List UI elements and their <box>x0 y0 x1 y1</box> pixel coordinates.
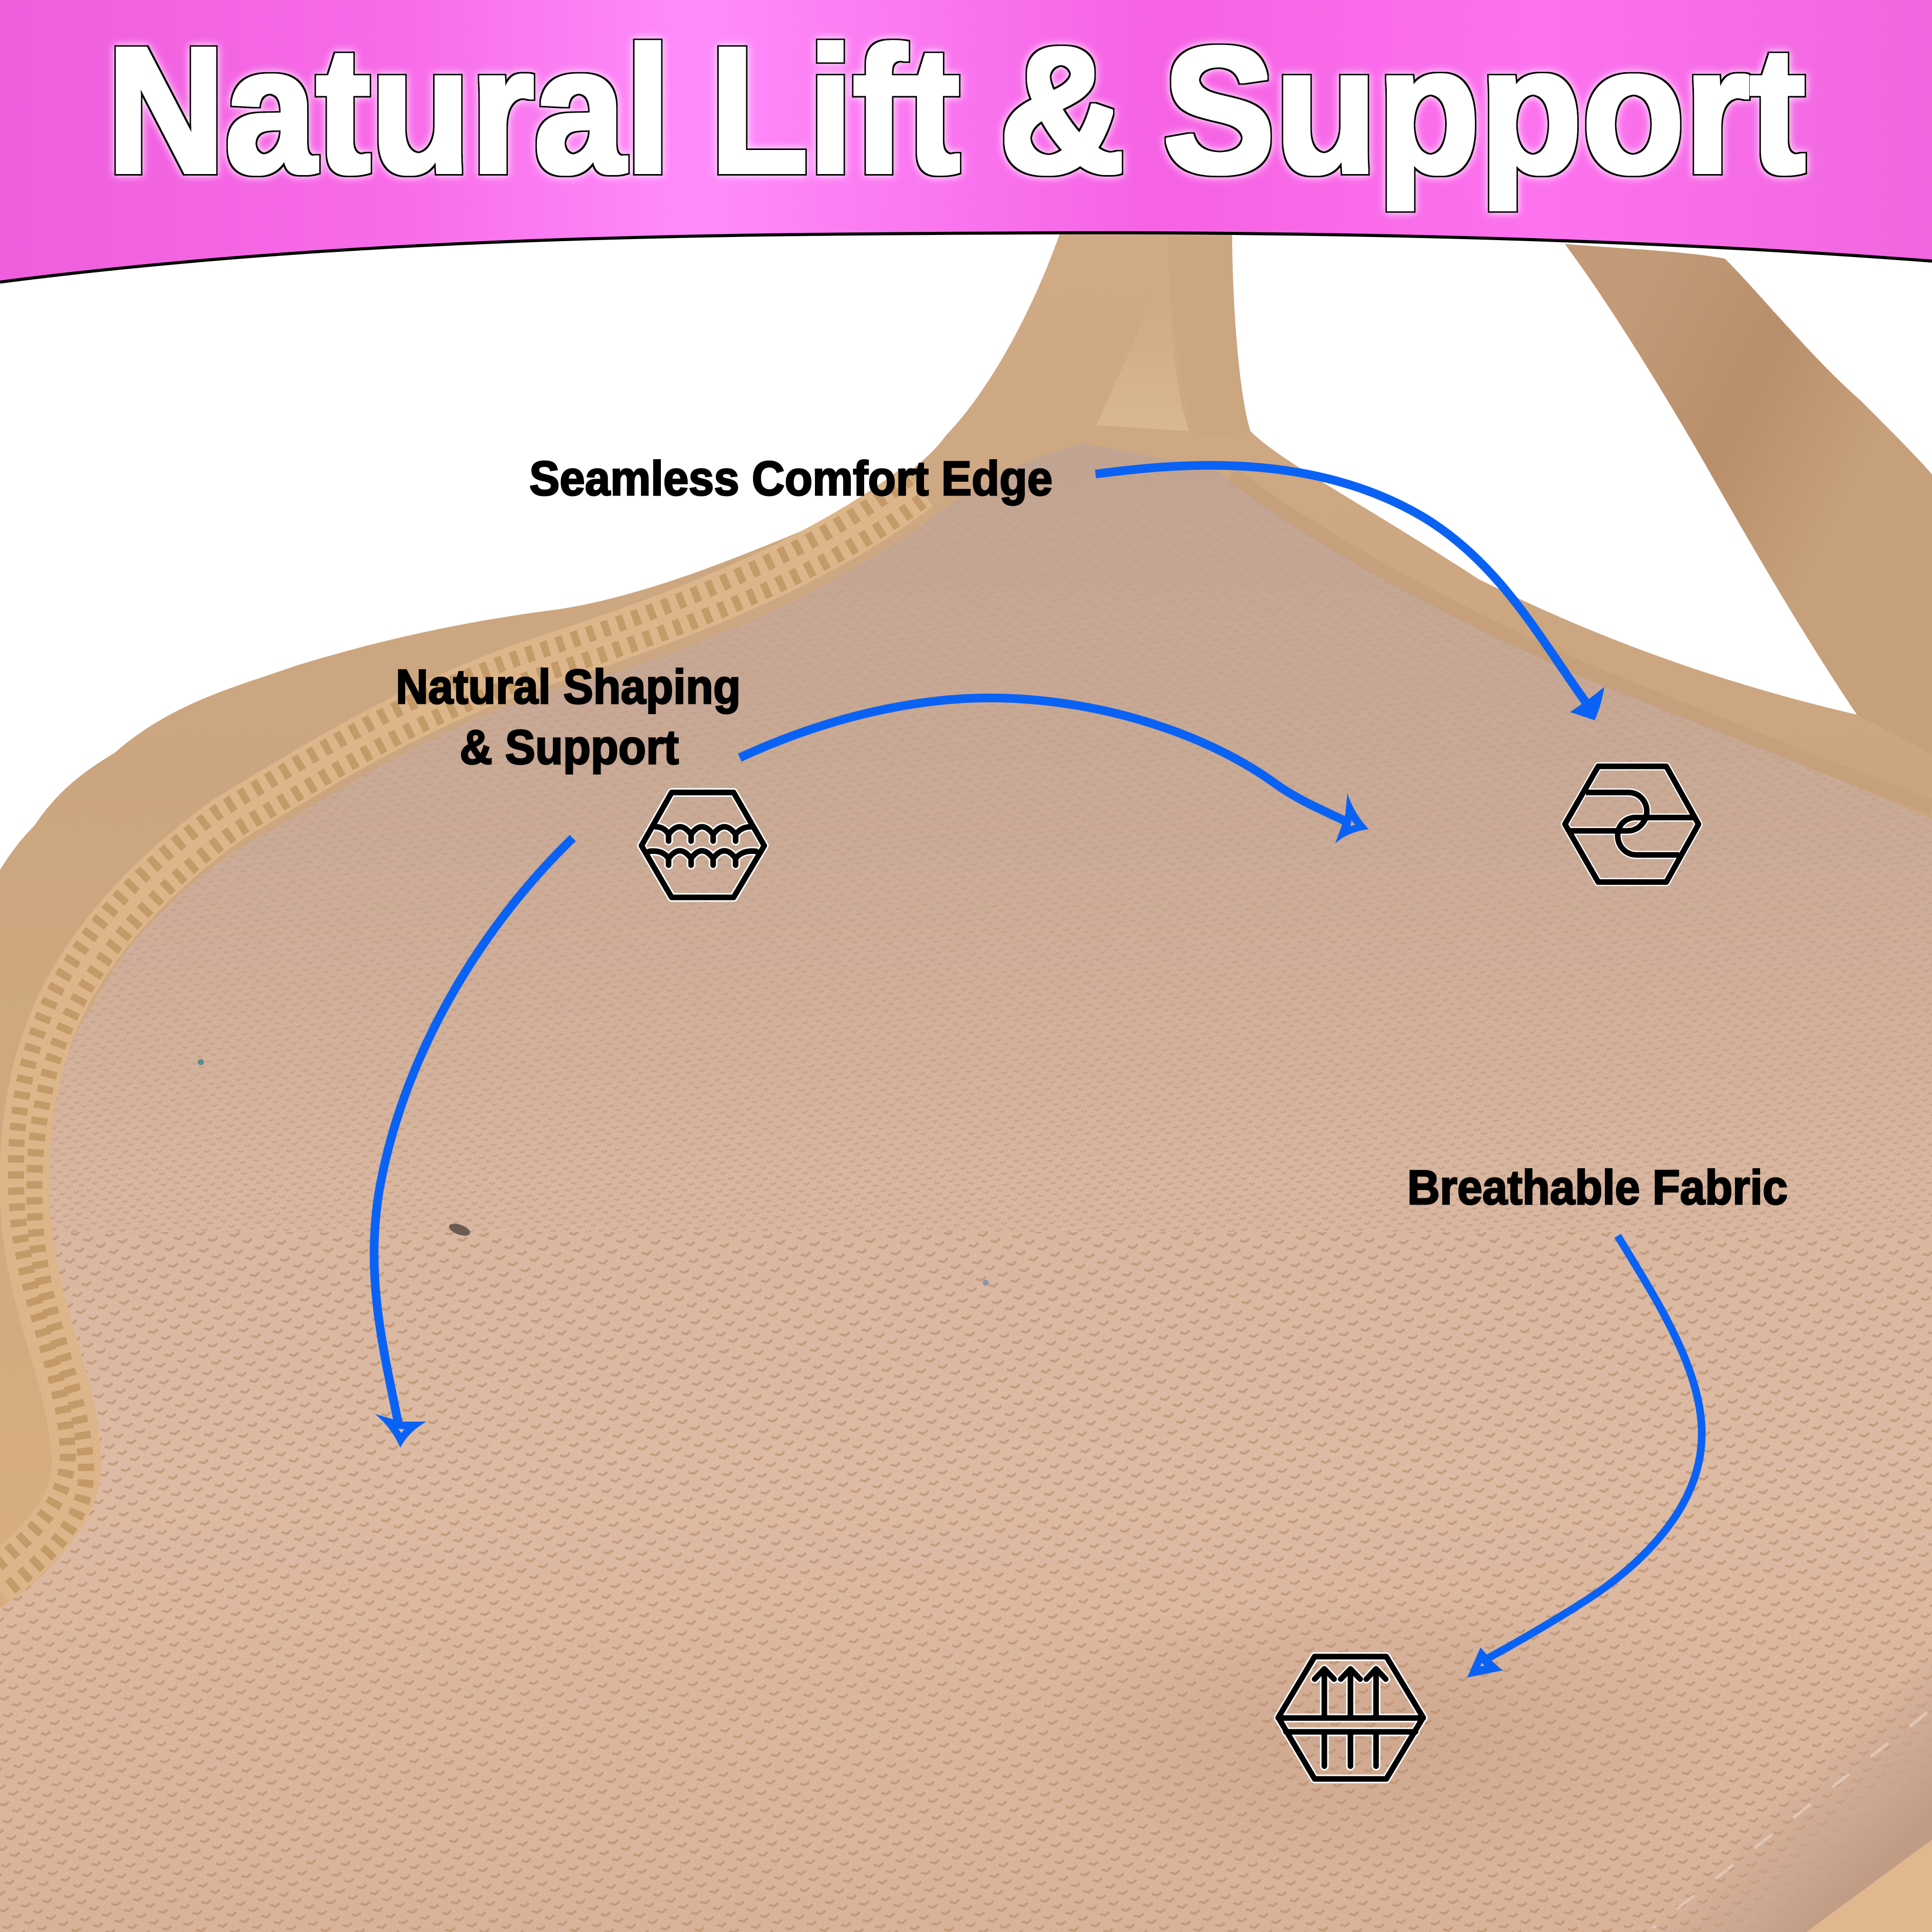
knitted fabric texture, coarse lower zone <box>0 1232 1932 1932</box>
stitched mesh seam <box>0 475 1932 1593</box>
banner black curved edge <box>0 233 1932 282</box>
icon: layered scallop hexagon <box>641 792 764 897</box>
icon: breathable airflow hexagon <box>1278 1657 1423 1779</box>
top banner <box>0 0 1932 282</box>
label: Natural Shaping & Support <box>396 660 741 775</box>
lower right hem <box>1590 1651 1932 1932</box>
inner fabric panel <box>0 443 1932 1932</box>
strap shading <box>1168 237 1251 437</box>
centre strap inner panel <box>1097 296 1189 431</box>
title: Support <box>1163 10 1806 211</box>
right shoulder strap <box>1565 244 1932 764</box>
arrow: natural shaping to centre <box>740 698 1369 844</box>
icon: interlocking seam hexagon <box>1565 766 1699 882</box>
title: Natural <box>107 10 671 210</box>
title: & <box>999 10 1125 210</box>
fabric shadow <box>998 1590 1737 1885</box>
arrow: breathable fabric to icon <box>1467 1236 1702 1678</box>
upper fabric fade <box>0 443 1932 1232</box>
banner shape <box>0 0 1932 282</box>
arrow: seamless edge to icon <box>1096 465 1604 720</box>
label: Seamless Comfort Edge: Seamless Comfort Edge <box>529 452 1053 506</box>
fabric specks <box>198 1059 989 1286</box>
title <box>107 10 1806 211</box>
label: Natural Shaping & Support: Natural Shaping <box>396 660 741 714</box>
title: Lift <box>710 10 960 210</box>
label: Breathable Fabric: Breathable Fabric <box>1407 1161 1788 1215</box>
knitted fabric texture, fine upper zone <box>0 443 1932 1232</box>
label: Natural Shaping & Support: & Support <box>460 720 679 775</box>
arrow: natural shaping downwards <box>374 838 573 1448</box>
